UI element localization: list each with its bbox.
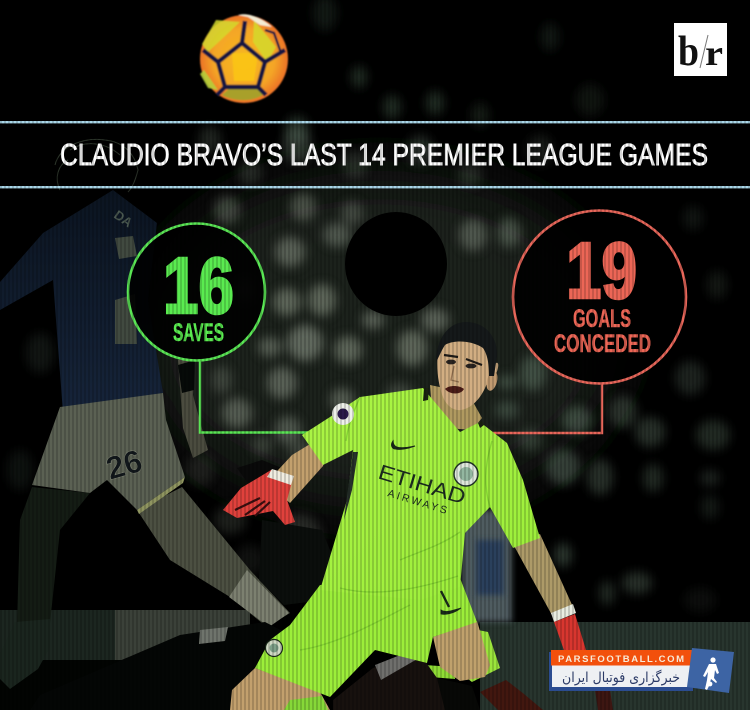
ball seams bbox=[203, 21, 285, 95]
hair bbox=[436, 322, 497, 376]
neck bbox=[430, 385, 482, 430]
face bbox=[437, 330, 498, 410]
city crest bbox=[454, 462, 478, 486]
jersey side stripe bbox=[344, 452, 358, 520]
nose bbox=[451, 366, 459, 382]
logo r: r bbox=[705, 33, 723, 73]
crowd haze bbox=[140, 170, 620, 510]
goals number: 19 bbox=[566, 226, 637, 315]
fallen player bbox=[30, 622, 300, 710]
conceded label: CONCEDED bbox=[554, 330, 651, 358]
stat: saves bbox=[128, 224, 320, 432]
stadium advertising hoarding bbox=[0, 510, 750, 710]
fallen player kit bbox=[375, 650, 419, 680]
etihad sponsor: ETIHAD bbox=[376, 461, 468, 509]
collar bbox=[423, 388, 484, 428]
jersey fold shadows bbox=[300, 397, 492, 650]
shorts crest bbox=[266, 640, 282, 656]
saves label: SAVES bbox=[173, 319, 224, 347]
right arm bbox=[513, 534, 573, 617]
shorts number bbox=[441, 591, 449, 607]
left sock bbox=[0, 619, 50, 689]
banner shadow bbox=[549, 652, 693, 691]
dark calf bbox=[437, 678, 480, 710]
hair outline bbox=[55, 139, 138, 192]
persian tagline: خبرگزاری فوتبال ایران bbox=[562, 669, 680, 686]
saves circle bbox=[128, 224, 265, 360]
airways sponsor: AIRWAYS bbox=[386, 487, 451, 518]
site name: PARSFOOTBALL.COM bbox=[558, 654, 684, 665]
right sock bbox=[464, 630, 500, 682]
footballer icon bbox=[703, 657, 719, 690]
shirt name: DA bbox=[111, 207, 136, 231]
hidden glove shadow bbox=[237, 460, 292, 494]
goals circle bbox=[513, 210, 686, 384]
right wristband bbox=[551, 604, 576, 622]
glove fingertip bbox=[595, 690, 613, 710]
shirt bbox=[0, 190, 163, 413]
logo b: b bbox=[678, 29, 699, 75]
blank black circle bbox=[345, 212, 447, 316]
shorts bbox=[255, 578, 477, 697]
bottom sock bbox=[284, 696, 328, 710]
eyes bbox=[446, 360, 476, 368]
fallen player under keeper bbox=[333, 650, 445, 710]
ear bbox=[485, 370, 499, 392]
nike swoosh bbox=[392, 441, 415, 449]
right sock bbox=[229, 570, 289, 627]
shorts swoosh bbox=[441, 608, 461, 614]
left glove bbox=[223, 469, 295, 525]
logo slash bbox=[700, 35, 708, 68]
left thigh bbox=[230, 668, 330, 710]
blue tile bbox=[687, 648, 734, 693]
goals label: GOALS bbox=[573, 305, 631, 333]
brows bbox=[444, 355, 482, 365]
watermark banner bbox=[549, 648, 734, 693]
premier league patch bbox=[332, 403, 354, 425]
title band rules bbox=[0, 121, 750, 188]
shorts number: 26 bbox=[102, 442, 146, 487]
right leg bbox=[137, 487, 290, 627]
saves connector bbox=[200, 361, 320, 432]
saves number: 16 bbox=[163, 241, 234, 330]
ball valve seam bbox=[265, 30, 281, 53]
right boot bbox=[480, 680, 543, 710]
right glove bbox=[554, 614, 586, 656]
right forearm bbox=[178, 360, 208, 458]
goalkeeper bbox=[223, 322, 613, 710]
white strip bbox=[552, 666, 690, 687]
Bleacher Report logo bbox=[674, 23, 727, 76]
jersey bbox=[302, 388, 540, 600]
neck and head bbox=[430, 322, 499, 430]
left leg bbox=[17, 487, 90, 623]
football bbox=[200, 14, 288, 103]
under-thigh kit bbox=[425, 665, 455, 679]
stat: goals conceded bbox=[480, 210, 686, 433]
mouth bbox=[445, 386, 464, 394]
defender player silhouette bbox=[0, 139, 300, 710]
ball highlights bbox=[202, 20, 276, 62]
dark body behind keeper bbox=[259, 520, 334, 605]
orange strip bbox=[551, 650, 692, 666]
shorts bbox=[32, 393, 185, 510]
left arm bbox=[266, 438, 330, 503]
goals connector bbox=[480, 384, 602, 433]
right thigh bbox=[433, 621, 490, 681]
